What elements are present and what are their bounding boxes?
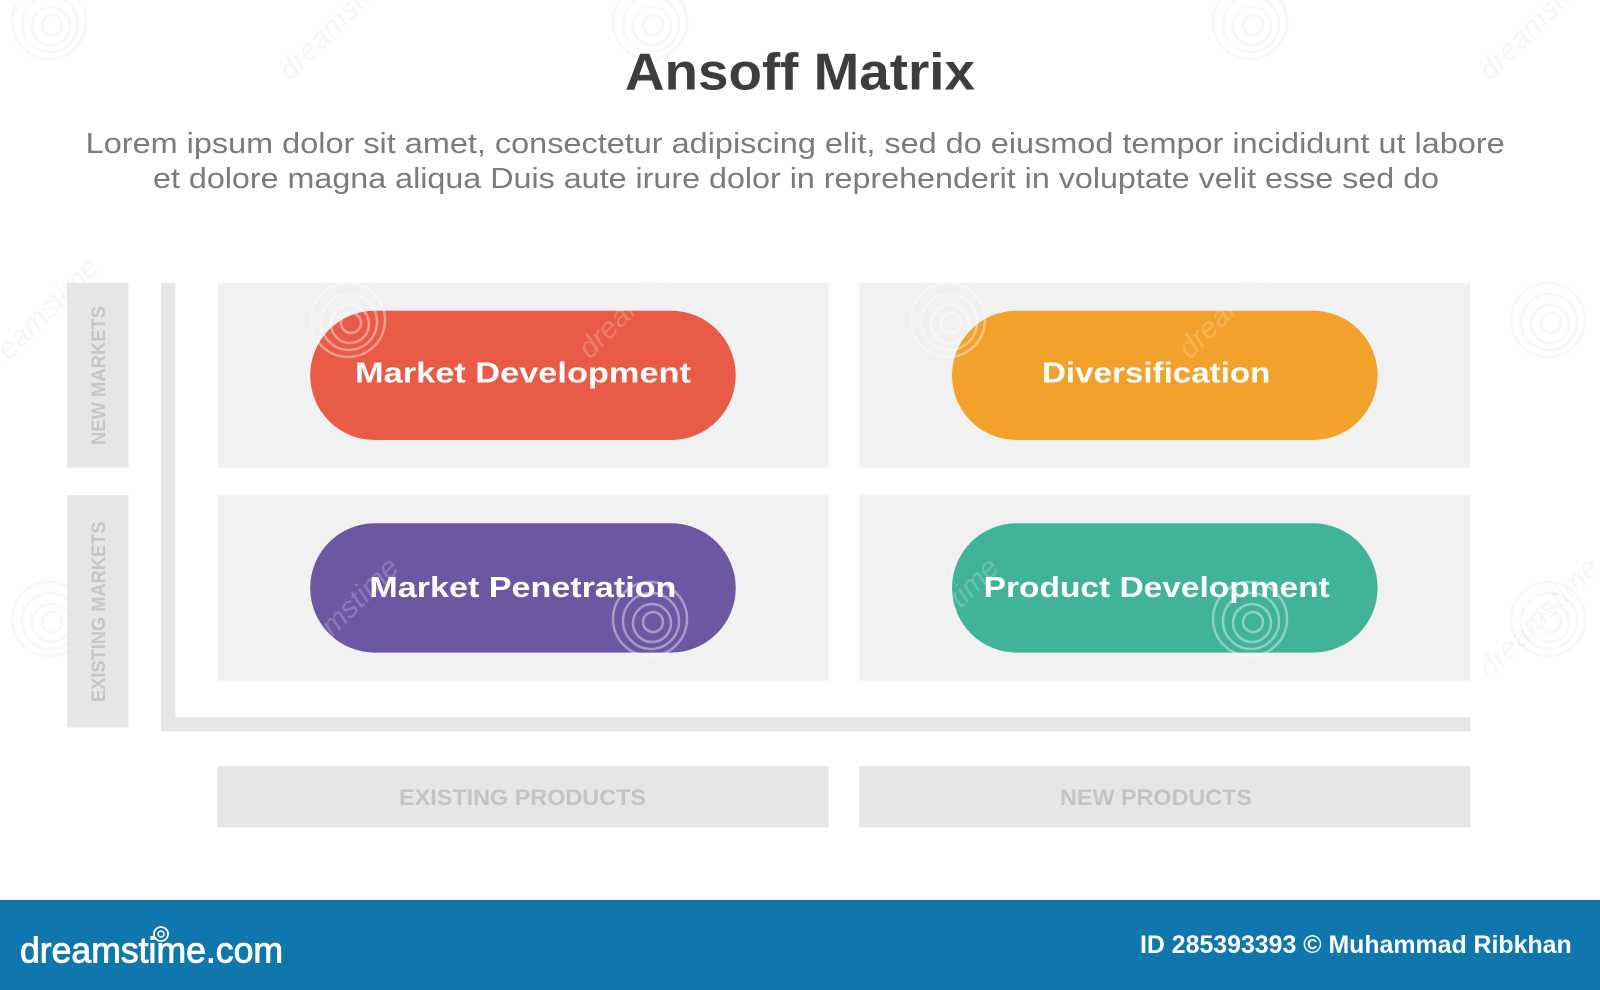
title: Ansoff Matrix: [625, 44, 975, 102]
text: dreamstime: [272, 551, 406, 685]
panel: market development: Market Development: [355, 358, 691, 390]
y axis label: existing markets: [67, 495, 129, 728]
text: dreamstime: [1172, 231, 1306, 365]
panel: market penetration: Market Penetration: [369, 572, 676, 604]
y axis label: new markets: NEW MARKETS: [89, 306, 110, 445]
matrix axis lines: [161, 283, 1470, 732]
subtitle text block: Lorem ipsum dolor sit amet, consectetur adipiscing elit, sed do eiusmod tempor incididunt ut labore: [86, 128, 1505, 160]
panel: product development: Product Development: [984, 572, 1330, 604]
panel: market development: [218, 283, 829, 468]
y axis label: new markets: [67, 283, 129, 468]
logo: dreamstime: dreamstime.com: [20, 930, 283, 971]
footer bar: [0, 900, 1600, 990]
image id and credit: ID 285393393 © Muhammad Ribkhan: [1140, 931, 1572, 959]
text: dreamstime: [572, 231, 706, 365]
x axis label: existing products: EXISTING PRODUCTS: [399, 785, 646, 810]
panel: product development: [859, 495, 1470, 681]
text: dreamstime: [872, 551, 1006, 685]
panel: market penetration: [218, 495, 829, 681]
x axis label: new products: NEW PRODUCTS: [1060, 785, 1252, 810]
x axis label: existing products: [218, 766, 829, 828]
panel: diversification: Diversification: [1042, 358, 1270, 390]
y axis label: existing markets: EXISTING MARKETS: [89, 522, 110, 702]
x axis label: new products: [859, 766, 1470, 828]
subtitle text block: [86, 128, 1505, 195]
panel: diversification: [859, 283, 1470, 468]
subtitle text block: et dolore magna aliqua Duis aute irure dolor in reprehenderit in voluptate velit esse sed do: [153, 163, 1439, 195]
